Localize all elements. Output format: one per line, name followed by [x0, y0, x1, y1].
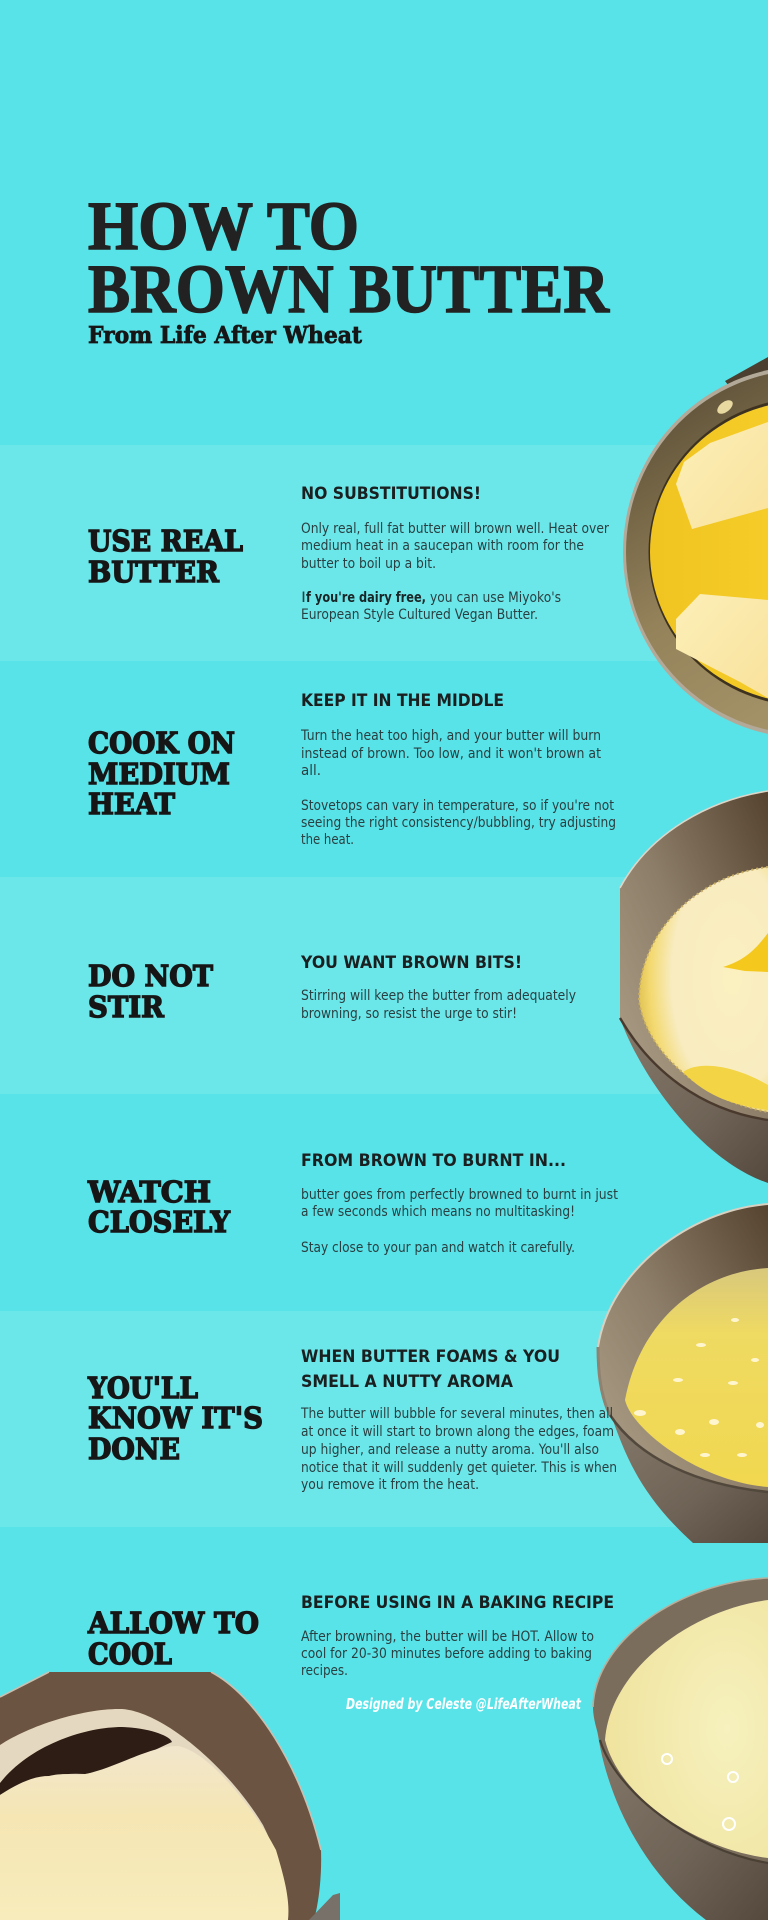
photo: butter foaming up in pan [593, 1578, 768, 1920]
step 1 text: Only real, full fat butter will brown well. Heat over [301, 521, 609, 537]
step 6 text [301, 1629, 594, 1679]
step 2 text: Stovetops can vary in temperature, so if you're not [301, 798, 614, 814]
step 4 text: Stay close to your pan and watch it carefully. [301, 1240, 575, 1256]
step 5 heading: KNOW IT'S [88, 1401, 263, 1435]
step 5 text: at once it will start to brown along the edges, foam [301, 1424, 614, 1440]
title: HOW TO [88, 188, 359, 264]
step 4 text: butter goes from perfectly browned to burnt in just [301, 1187, 618, 1203]
step 2 text: the heat. [301, 832, 354, 848]
title: BROWN BUTTER [88, 251, 610, 327]
step 6 text: recipes. [301, 1663, 348, 1679]
step 2 text: seeing the right consistency/bubbling, try adjusting [301, 815, 616, 831]
step 6 subheading: BEFORE USING IN A BAKING RECIPE [301, 1593, 614, 1613]
step 1 heading [88, 524, 243, 589]
step 6 heading [87, 1606, 259, 1671]
step 4 text: a few seconds which means no multitasking! [301, 1204, 575, 1220]
step 1 text: you can use Miyoko's [430, 590, 561, 606]
photo: browned butter in pan, cooling [0, 1672, 340, 1920]
step 2 text: instead of brown. Too low, and it won't brown at [301, 746, 601, 762]
band: you'll know it's done [0, 1311, 768, 1527]
step 3 heading: STIR [88, 990, 165, 1024]
step 5 text: The butter will bubble for several minutes, then all [300, 1406, 613, 1422]
step 2 heading [88, 726, 235, 821]
step 5 text: notice that it will suddenly get quieter. This is when [301, 1460, 617, 1476]
step 5 text [300, 1406, 617, 1493]
step 1 text: European Style Cultured Vegan Butter. [301, 607, 538, 623]
step 6 heading: ALLOW TO [87, 1606, 259, 1640]
step 2 heading: MEDIUM [88, 757, 230, 791]
step 5 heading: DONE [88, 1432, 180, 1466]
step 4 text [301, 1187, 618, 1256]
step 2 text: Turn the heat too high, and your butter will burn [300, 728, 601, 744]
photo: butter bubbling in pan [598, 1204, 768, 1543]
step 6 text: After browning, the butter will be HOT. Allow to [301, 1629, 594, 1645]
step 1 subheading: NO SUBSTITUTIONS! [301, 484, 481, 504]
step 1 text: I [301, 590, 306, 606]
step 3 heading [88, 959, 213, 1024]
step 1 text: butter to boil up a bit. [301, 556, 436, 572]
step 1 heading: USE REAL [88, 524, 243, 558]
step 4 heading: WATCH [87, 1175, 211, 1209]
step 1 text: medium heat in a saucepan with room for the [301, 538, 584, 554]
step 2 heading: HEAT [88, 787, 175, 821]
step 1 heading: BUTTER [88, 555, 220, 589]
step 1 text [301, 521, 609, 623]
step 3 text: Stirring will keep the butter from adequately [301, 988, 576, 1004]
designer credit: Designed by Celeste @LifeAfterWheat [346, 1695, 582, 1713]
subtitle: From Life After Wheat [88, 322, 362, 349]
step 4 heading: CLOSELY [88, 1205, 230, 1239]
step 6 text: cool for 20-30 minutes before adding to baking [301, 1646, 592, 1662]
step 5 subheading [301, 1347, 560, 1392]
step 5 text: you remove it from the heat. [301, 1477, 479, 1493]
step 3 text: browning, so resist the urge to stir! [301, 1006, 517, 1022]
step 3 text [301, 988, 576, 1022]
step 1 text: f you're dairy free, [306, 590, 426, 606]
band: use real butter [0, 445, 768, 661]
step 3 heading: DO NOT [88, 959, 213, 993]
photo: butter foaming in pan [620, 791, 768, 1183]
step 4 heading [87, 1175, 230, 1239]
step 5 subheading: SMELL A NUTTY AROMA [301, 1372, 514, 1392]
title [88, 188, 610, 327]
step 2 subheading: KEEP IT IN THE MIDDLE [301, 691, 504, 711]
step 2 text: all. [301, 763, 321, 779]
step 5 heading: YOU'LL [87, 1371, 198, 1405]
step 5 subheading: WHEN BUTTER FOAMS & YOU [301, 1347, 560, 1367]
step 2 text [300, 728, 616, 848]
step 5 text: up higher, and release a nutty aroma. You'll also [301, 1442, 599, 1458]
step 6 heading: COOL [88, 1637, 172, 1671]
step 4 subheading: FROM BROWN TO BURNT IN... [301, 1151, 566, 1171]
photo: butter sticks melting in saucepan [623, 357, 768, 738]
band: do not stir [0, 877, 768, 1094]
step 3 subheading: YOU WANT BROWN BITS! [300, 953, 522, 973]
step 2 heading: COOK ON [88, 726, 235, 760]
step 5 heading [87, 1371, 263, 1466]
